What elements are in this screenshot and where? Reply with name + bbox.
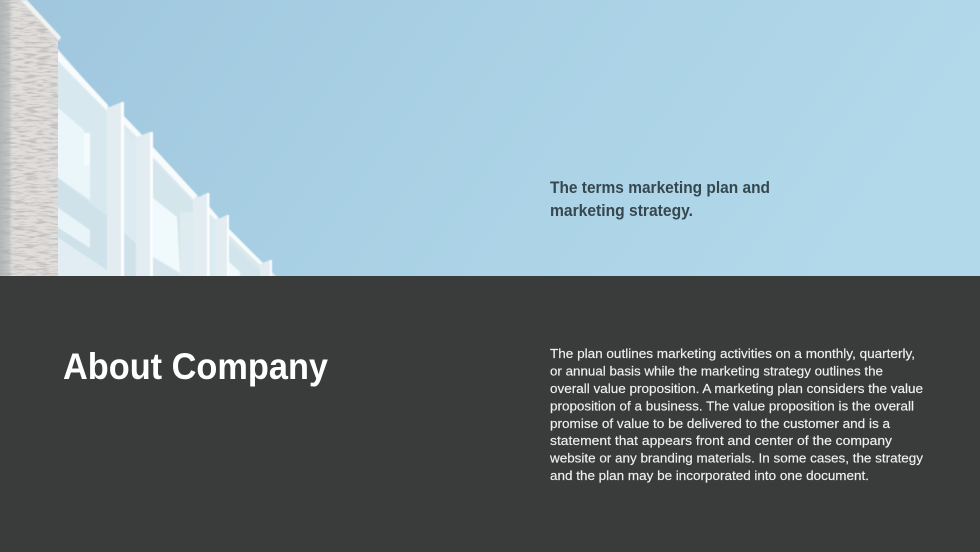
vertical fins [107, 102, 122, 277]
body text block: promise of value to be delivered to the customer and is a [550, 416, 891, 431]
body text block: and the plan may be incorporated into one document. [550, 468, 869, 483]
section C panels [153, 160, 193, 277]
tagline text: The terms marketing plan and [550, 179, 770, 197]
body text block: or annual basis while the marketing strategy outlines the [550, 364, 883, 378]
body text block: statement that appears front and center of the company [550, 433, 893, 448]
building facade [57, 48, 277, 277]
section B panel [124, 130, 136, 277]
body text block: proposition of a business. The value proposition is the overall [550, 398, 914, 414]
heading: About Company: About Company [63, 346, 328, 387]
brick corner tower [0, 0, 61, 277]
section D panels [209, 215, 216, 277]
section A panels [57, 64, 107, 277]
body text block: The plan outlines marketing activities on a monthly, quarterly, [550, 346, 915, 361]
sky background [0, 0, 980, 277]
cornice highlights [57, 50, 108, 112]
body text block: website or any branding materials. In some cases, the strategy [549, 450, 924, 466]
tagline text: marketing strategy. [550, 202, 693, 220]
photo: building against blue sky [0, 0, 980, 277]
panel: dark company band [0, 276, 980, 552]
body text block: overall value proposition. A marketing plan considers the value [550, 381, 923, 396]
